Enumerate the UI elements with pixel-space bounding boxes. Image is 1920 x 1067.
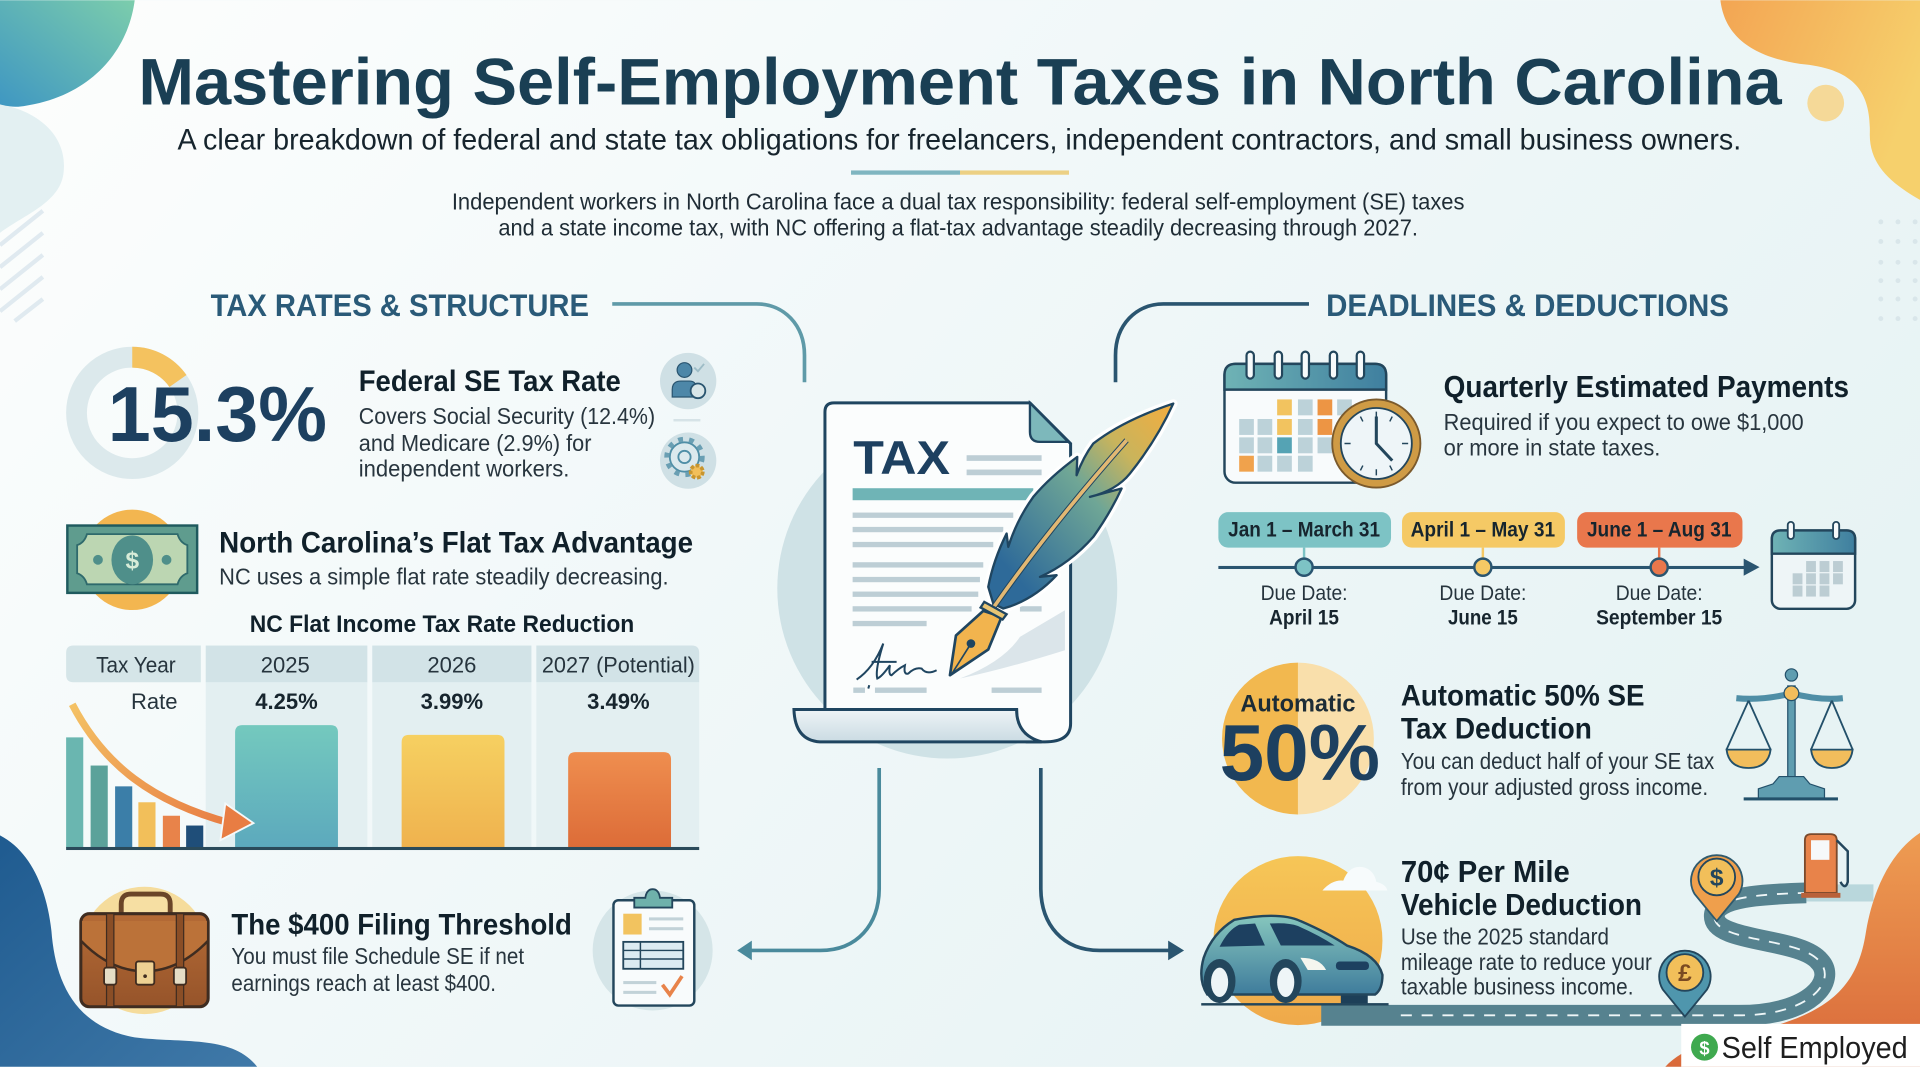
chart baseline	[66, 847, 699, 850]
nib ring	[981, 602, 1007, 620]
bar 2025	[235, 725, 338, 848]
table header labels: 2027 (Potential)	[542, 652, 695, 677]
description: Use the 2025 standard	[1401, 923, 1609, 949]
icon: person with coin	[660, 353, 716, 409]
due date 3	[1596, 582, 1722, 630]
icon: fuel pump	[1801, 834, 1848, 898]
description: NC uses a simple flat rate steadily decreasing.	[219, 563, 669, 589]
decoration: top-left light blob	[0, 104, 64, 233]
icon: dollar bill	[67, 510, 197, 610]
icon: balance scales	[1727, 669, 1853, 800]
road	[1321, 893, 1873, 1015]
period 3: June 1 – Aug 31	[1587, 519, 1731, 542]
table columns	[66, 646, 699, 848]
period 1	[1218, 512, 1391, 576]
icon: clipboard	[593, 889, 713, 1010]
arrow: declining rate	[72, 704, 253, 840]
icon: pound pin	[1659, 951, 1711, 1017]
due date 3: Due Date:	[1616, 582, 1703, 605]
description: independent workers.	[359, 456, 569, 482]
icon: dollar pin	[1691, 855, 1742, 921]
bar 2026	[402, 735, 504, 848]
heading: tax rates and structure: TAX RATES & STRUCTURE	[211, 287, 589, 323]
center illustration: tax document and quill	[777, 403, 1173, 759]
description	[359, 403, 655, 482]
heading	[1401, 855, 1642, 922]
signature	[857, 644, 937, 689]
quill nib	[950, 611, 1002, 675]
table rate row: Rate	[131, 689, 178, 714]
heading: Automatic 50% SE	[1401, 680, 1644, 713]
paper sheet	[825, 403, 1071, 742]
decoration: bottom-left blue blob	[0, 835, 257, 1067]
decoration: top-left teal blob	[0, 0, 135, 107]
badge label: Automatic	[1240, 691, 1356, 718]
quill feather body	[988, 404, 1173, 609]
heading: 70¢ Per Mile	[1401, 855, 1570, 889]
due date 1: Due Date:	[1261, 582, 1348, 605]
heading: Quarterly Estimated Payments	[1444, 370, 1849, 404]
icon: small calendar	[1772, 522, 1855, 609]
description: mileage rate to reduce your	[1401, 949, 1652, 975]
panel: federal SE tax rate	[77, 353, 716, 489]
watermark: $	[1699, 1038, 1710, 1059]
nib slit	[952, 639, 975, 674]
table rate row	[131, 689, 650, 714]
circle badge	[1222, 663, 1374, 815]
heading	[1401, 680, 1644, 746]
watermark: Self Employed	[1722, 1031, 1908, 1065]
period 3	[1577, 512, 1742, 576]
cloud	[1322, 867, 1387, 890]
decoration: dot grid	[1878, 219, 1918, 321]
subtitle: A clear breakdown of federal and state tax obligations for freelancers, independent contractors, and small business owners.	[178, 124, 1741, 157]
description: earnings reach at least $400.	[231, 970, 496, 996]
decoration: diagonal stripes	[0, 211, 43, 321]
description	[1401, 923, 1652, 1000]
due date 1	[1261, 582, 1348, 630]
heading: The $400 Filing Threshold	[231, 909, 572, 942]
heading: North Carolina’s Flat Tax Advantage	[219, 526, 693, 559]
due date 1: April 15	[1269, 607, 1339, 630]
panel: filing threshold	[81, 887, 713, 1014]
table header labels	[96, 652, 695, 677]
description: from your adjusted gross income.	[1401, 774, 1708, 800]
table header labels: 2026	[427, 652, 476, 677]
period 2: April 1 – May 31	[1411, 519, 1555, 542]
period 2	[1402, 512, 1565, 576]
timeline	[1218, 512, 1855, 630]
title divider	[851, 170, 1069, 175]
icon: pound pin: £	[1678, 960, 1692, 987]
description: taxable business income.	[1401, 974, 1633, 1000]
table header labels: 2025	[261, 652, 310, 677]
title: Mastering Self-Employment Taxes in North Carolina	[138, 45, 1783, 119]
quill feather outline	[988, 404, 1173, 609]
description: and Medicare (2.9%) for	[359, 430, 592, 456]
intro paragraph: and a state income tax, with NC offering a flat-tax advantage steadily decreasing through 2027.	[498, 214, 1418, 240]
description: You can deduct half of your SE tax	[1401, 748, 1715, 774]
bar 2027	[568, 752, 671, 848]
table rate row: 3.49%	[587, 689, 650, 714]
panel: flat tax advantage	[66, 510, 699, 850]
scroll bottom	[794, 710, 1042, 742]
mini declining bars	[66, 737, 203, 848]
arrow: document to vehicle deduction	[1041, 768, 1184, 960]
due date 2: Due Date:	[1439, 582, 1526, 605]
table rate row: 4.25%	[255, 689, 318, 714]
description: Covers Social Security (12.4%)	[359, 403, 655, 429]
heading: Federal SE Tax Rate	[359, 365, 621, 398]
connector: left heading to document	[612, 304, 804, 382]
heading: Tax Deduction	[1401, 713, 1592, 746]
document text lines	[853, 455, 1042, 693]
heading: deadlines and deductions: DEADLINES & DEDUCTIONS	[1326, 287, 1729, 323]
chart: rate reduction table and bars	[66, 646, 699, 850]
icon: dollar pin: $	[1710, 865, 1724, 892]
intro paragraph	[452, 189, 1464, 240]
due date 2: June 15	[1448, 607, 1518, 630]
backdrop circle	[777, 419, 1117, 759]
panel: automatic 50% deduction	[1220, 663, 1853, 815]
decoration: bottom-right orange blob	[1665, 833, 1920, 1067]
description: Required if you expect to owe $1,000	[1444, 409, 1804, 435]
heading: Vehicle Deduction	[1401, 888, 1642, 922]
due date 2	[1439, 582, 1526, 630]
intro paragraph: Independent workers in North Carolina face a dual tax responsibility: federal self-employment (SE) taxes	[452, 189, 1464, 215]
period 1: Jan 1 – March 31	[1228, 519, 1380, 542]
document heading: TAX	[853, 432, 950, 485]
icon: calendar and clock	[1224, 352, 1420, 488]
quill shaft	[994, 440, 1127, 607]
description: or more in state taxes.	[1444, 435, 1660, 461]
watermark	[1681, 1024, 1920, 1067]
arrow: document to filing threshold	[737, 768, 879, 960]
panel: quarterly estimated payments	[1218, 352, 1855, 630]
table rate row: 3.99%	[421, 689, 483, 714]
decoration: top-right orange blob	[1720, 0, 1920, 200]
due date 3: September 15	[1596, 607, 1722, 630]
description	[1444, 409, 1804, 461]
small separator	[673, 419, 700, 421]
description	[231, 943, 525, 996]
donut chart 15.3%	[77, 357, 188, 469]
icon: car	[1201, 916, 1389, 1006]
connector: right heading to document	[1116, 304, 1309, 382]
table header labels: Tax Year	[96, 652, 176, 677]
chart title: NC Flat Income Tax Rate Reduction	[250, 611, 634, 638]
sun circle	[1213, 856, 1382, 1025]
timeline axis	[1218, 559, 1760, 576]
icon: dollar bill: $	[125, 547, 139, 574]
description: You must file Schedule SE if net	[231, 943, 525, 969]
big number: 50%	[1220, 708, 1380, 797]
icon: gears	[660, 432, 716, 489]
decoration: small circle	[1807, 85, 1844, 121]
description	[1401, 748, 1715, 800]
big number: 15.3%	[108, 370, 327, 458]
icon: briefcase	[81, 887, 208, 1014]
folded corner	[1030, 403, 1068, 442]
feather shadow	[960, 610, 1065, 679]
panel: vehicle deduction	[1201, 834, 1873, 1025]
